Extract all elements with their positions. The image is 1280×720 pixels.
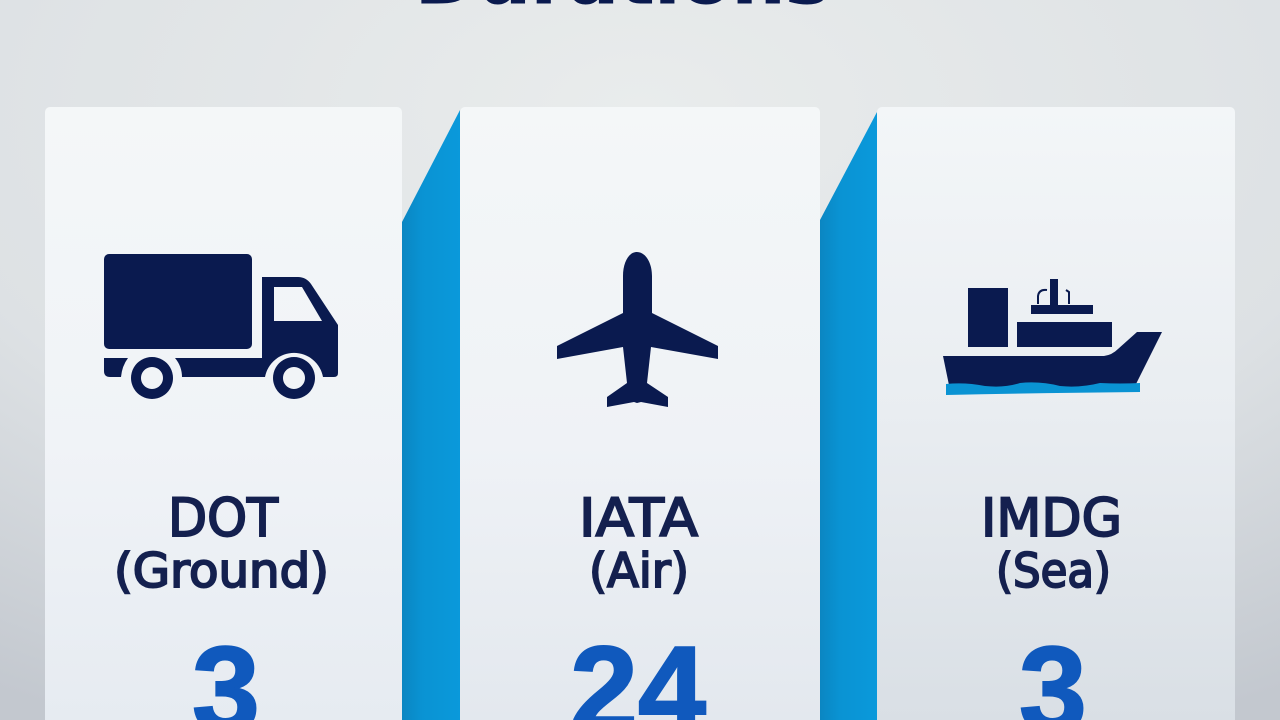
card background xyxy=(460,107,820,720)
icon: airplane xyxy=(557,252,718,407)
label: DOT: DOT xyxy=(168,488,279,549)
card background xyxy=(45,107,402,720)
connector strip: ground to air xyxy=(402,110,460,720)
icon: truck xyxy=(104,254,338,399)
icon: ship xyxy=(943,279,1162,395)
card background xyxy=(877,107,1235,720)
label: Sea: (Sea) xyxy=(996,544,1111,599)
panel: IMDG sea xyxy=(877,107,1235,720)
label: IATA: IATA xyxy=(579,488,698,549)
connector strip: air to sea xyxy=(820,112,877,720)
label: Air: (Air) xyxy=(589,544,689,599)
label: Ground: (Ground) xyxy=(114,544,329,599)
label: IMDG: IMDG xyxy=(981,488,1122,549)
panel: DOT ground xyxy=(45,107,402,720)
panel: IATA air xyxy=(460,107,820,720)
